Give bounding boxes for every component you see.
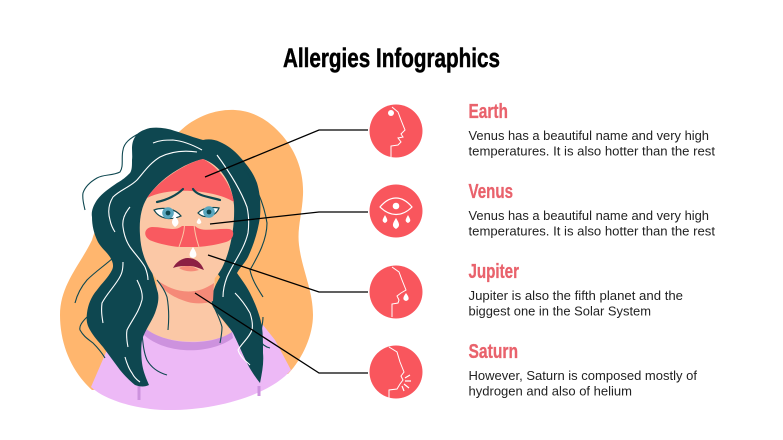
text block: Earth: temperatures. It is also hotter than the rest [468,144,715,158]
text block: Earth [468,101,715,158]
hair [87,128,263,386]
text block: Jupiter: biggest one in the Solar System [468,304,651,318]
icon: watery eye [370,184,422,238]
left eye [154,207,181,219]
icon: runny nose [370,266,422,318]
text block: Jupiter [468,261,683,318]
text block: Venus: Venus has a beautiful name and very high [468,208,709,223]
icon: head [370,104,422,158]
text block: Earth: Earth [468,101,508,123]
neck redness [157,280,214,303]
connector line: eyes [210,212,368,224]
text block: Saturn: Saturn [468,341,518,363]
illustration: woman with allergy symptoms [60,110,313,410]
connector line: throat [195,293,368,373]
text block: Jupiter: Jupiter is also the fifth planet and the [468,288,683,303]
mouth [173,258,204,271]
icon: coughing head [370,346,422,398]
tears [172,216,201,258]
neck [145,270,232,342]
connector line: forehead [205,130,368,177]
text block: Saturn: hydrogen and also of helium [468,384,632,398]
eyebrows [157,189,220,202]
collar [143,328,233,350]
text block: Venus: temperatures. It is also hotter than the rest [468,224,715,238]
text block: Saturn [468,341,697,398]
shirt seams [139,386,259,400]
connector line: nose [208,255,368,292]
right eye [198,206,219,218]
cheek and nose rash [145,226,233,247]
text block: Saturn: However, Saturn is composed mostly of [468,368,697,383]
loose hair strands [75,133,270,375]
shirt [91,325,291,410]
forehead rash [147,159,234,202]
title: Allergies Infographics [283,43,500,73]
face [140,159,234,291]
nose lines [179,213,199,247]
hair highlights [102,140,252,382]
text block: Earth: Venus has a beautiful name and very high [468,128,709,143]
orange background blob [60,110,313,390]
text block: Venus [468,181,715,238]
text block: Jupiter: Jupiter [468,261,519,283]
text block: Venus: Venus [468,181,513,203]
